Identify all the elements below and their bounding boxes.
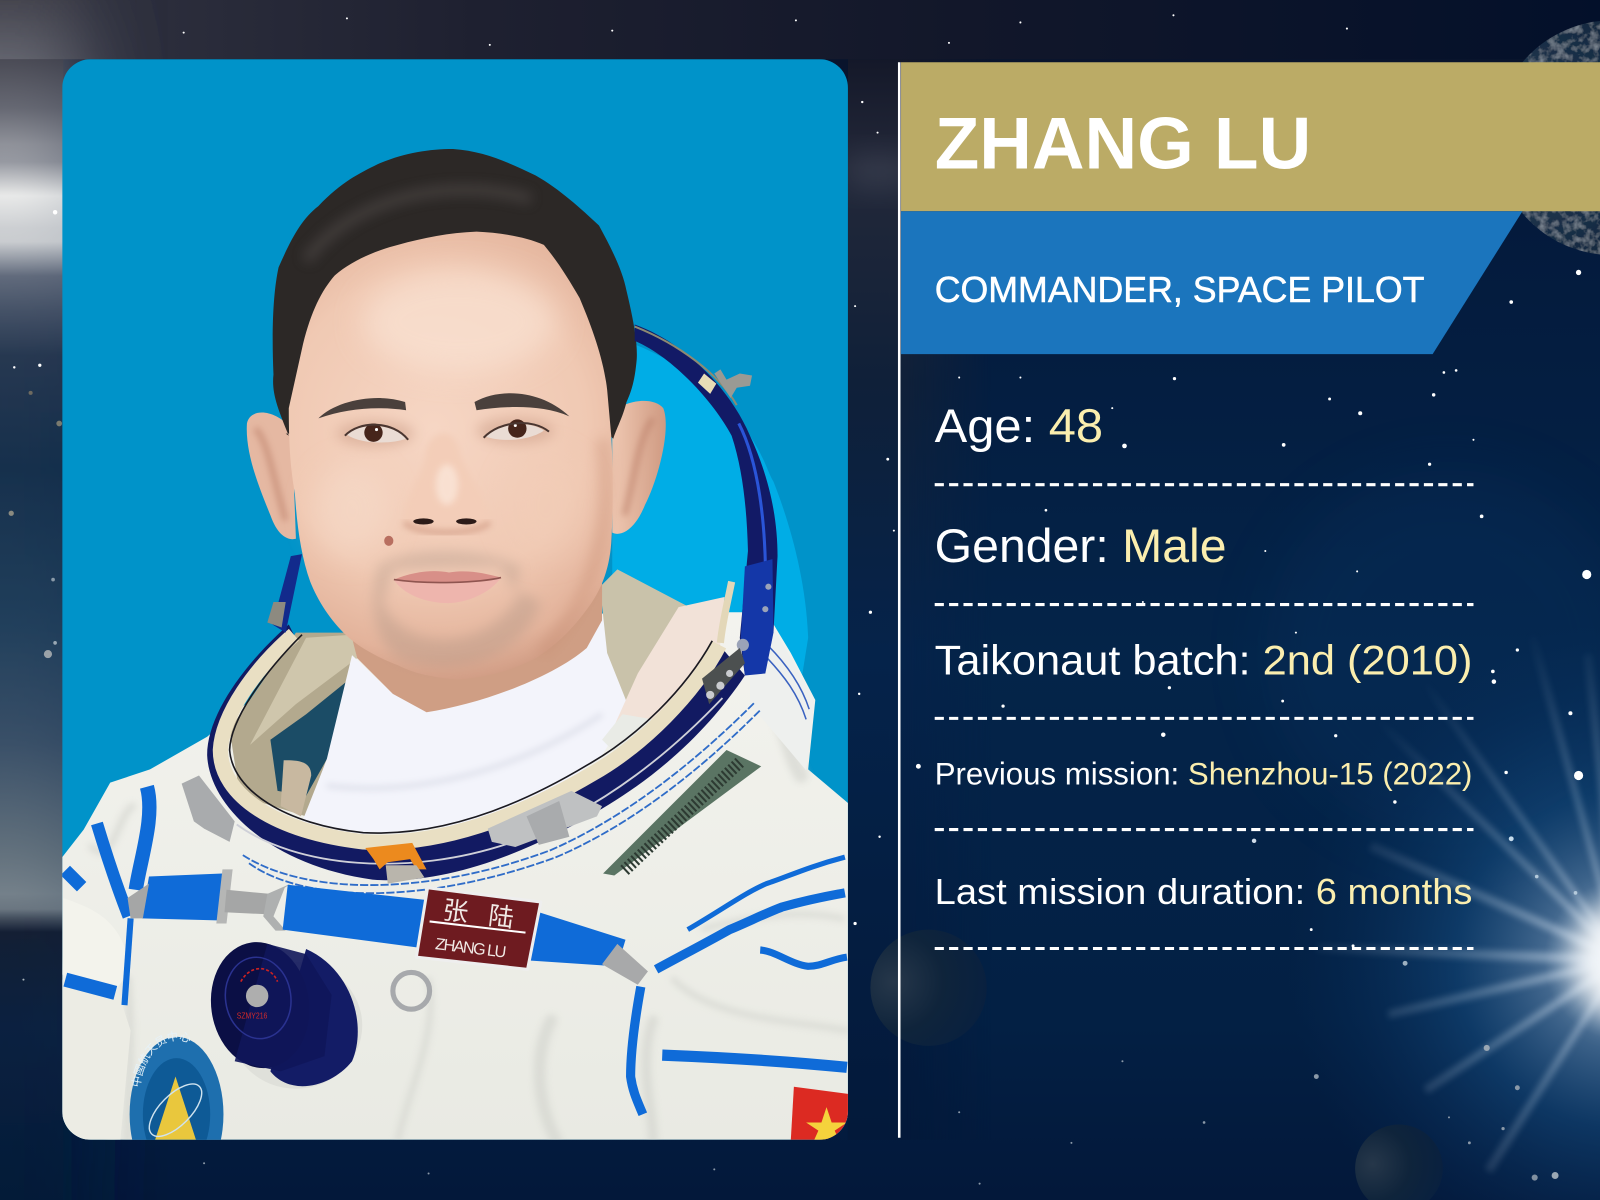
hoop latch bolts	[737, 584, 771, 651]
right tan collar	[602, 569, 686, 700]
planet: top right	[1495, 20, 1600, 255]
device label: SZMY216	[237, 1011, 268, 1020]
name tag latin: ZHANG LU	[434, 935, 507, 962]
eyebrows	[318, 393, 569, 418]
teal inner lining	[270, 682, 346, 796]
mission patch	[130, 1031, 224, 1140]
neck ring cream band	[220, 635, 719, 842]
round device	[203, 936, 362, 1089]
eye right	[484, 419, 549, 440]
white scarf tab	[602, 714, 652, 746]
device red ring text	[241, 969, 278, 982]
silver plate: front right	[488, 791, 602, 847]
silver clasp: left	[182, 776, 235, 842]
strap buckle	[128, 869, 291, 931]
ear inner shadows	[255, 418, 653, 520]
cream tab	[698, 373, 716, 394]
nose shadow	[404, 522, 490, 532]
neck ring navy band	[207, 624, 745, 880]
pale inner tan highlight	[250, 635, 357, 745]
mole	[384, 536, 393, 546]
ring plate bolts	[706, 670, 733, 699]
left chest strap	[142, 873, 222, 920]
orange latch	[365, 843, 427, 884]
tan fold	[281, 760, 311, 816]
helmet lighter circle	[612, 345, 808, 675]
left ear	[247, 413, 296, 539]
fact: age: Age: 48	[935, 400, 1103, 452]
white turtleneck	[301, 617, 628, 835]
jaw shadow	[556, 438, 614, 632]
vertical divider line	[898, 62, 901, 1138]
planet: centre	[870, 930, 987, 1046]
patch lettering: 中國航天员中心	[131, 1031, 190, 1086]
name tag	[416, 888, 541, 969]
collar flap left	[62, 980, 131, 1140]
cheek highlight left	[294, 478, 378, 550]
helmet upper hoop	[635, 324, 778, 676]
hoop lower latch	[741, 559, 773, 676]
nostrils	[413, 518, 477, 524]
suit right shoulder collar	[768, 696, 806, 770]
hoop blue highlight	[739, 423, 766, 602]
eye left	[345, 423, 408, 443]
photo backdrop	[62, 59, 848, 1140]
nose	[428, 436, 456, 464]
chest straps blue stripes, left	[65, 787, 149, 1005]
nose highlight	[436, 464, 458, 505]
hoop left clamp	[267, 602, 286, 628]
turtleneck fold shadow	[327, 714, 602, 788]
hair	[273, 149, 637, 439]
chest strap centre	[283, 885, 427, 948]
role text: COMMANDER, SPACE PILOT	[935, 270, 1424, 310]
eye socket shadow	[337, 417, 554, 447]
suit shading folds	[71, 704, 847, 1140]
fact: previous mission: Previous mission: Shenzhou-15 (2022)	[935, 756, 1472, 792]
collar stitching	[243, 702, 760, 893]
right silver plate	[702, 648, 745, 704]
forehead highlight	[362, 270, 556, 372]
role banner	[901, 211, 1522, 354]
astronaut name: ZHANG LU	[935, 101, 1311, 184]
left chest lower panel	[62, 959, 124, 986]
name banner	[901, 62, 1600, 211]
face	[289, 232, 613, 680]
fact: gender: Gender: Male	[935, 520, 1227, 572]
right ear	[612, 401, 666, 534]
tan inner collar, left	[230, 633, 359, 816]
mouth	[394, 571, 501, 603]
flag patch	[791, 1087, 848, 1140]
collar blue stitching	[767, 645, 809, 719]
right strap buckle	[602, 944, 648, 985]
name tag hanzi: 张 陆	[441, 897, 515, 933]
space suit body	[62, 612, 848, 1140]
fact: taikonaut batch: Taikonaut batch: 2nd (2010)	[935, 636, 1472, 683]
neck ring black inner line	[230, 635, 712, 833]
stubble	[374, 551, 541, 667]
neck ring silver line	[237, 698, 722, 864]
hoop upper clamp	[714, 369, 752, 398]
hoop inner tan rim	[635, 327, 737, 405]
metal ring	[393, 972, 430, 1009]
cheek highlight right	[505, 454, 587, 556]
pink scarf	[616, 597, 724, 722]
hair highlight	[306, 190, 531, 260]
silver latch: front right	[527, 801, 569, 845]
neck	[352, 571, 602, 712]
astronaut portrait photo	[62, 59, 848, 1140]
chest strap right	[526, 910, 626, 966]
blue stripes, right arm	[631, 857, 847, 1114]
planet: bottom	[1355, 1124, 1443, 1200]
suit zipper	[603, 750, 761, 876]
hoop left stub	[272, 554, 302, 633]
fact: last mission duration: Last mission duration: 6 months	[935, 872, 1472, 912]
